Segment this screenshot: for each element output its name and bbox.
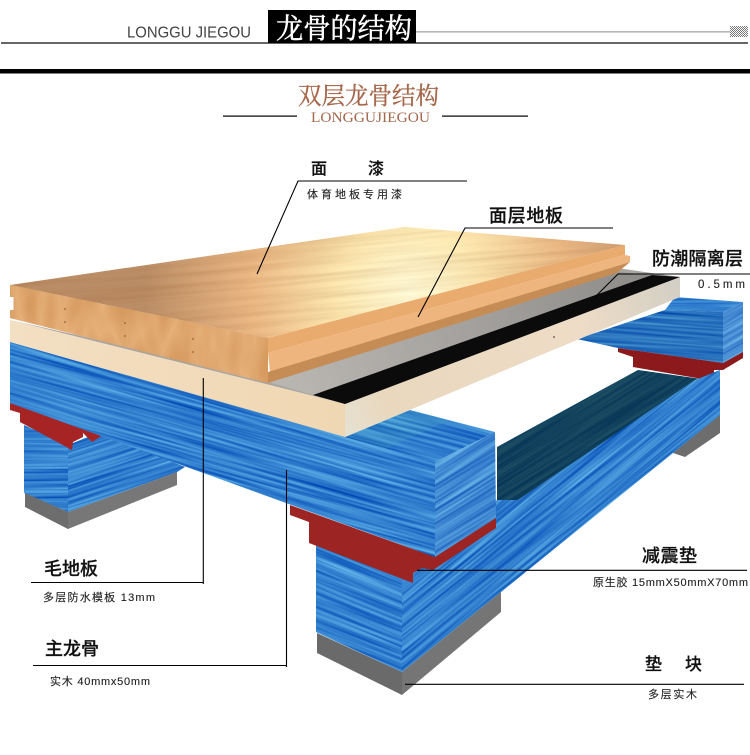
joist end face — [316, 546, 402, 672]
section title: LONGGUJIEGOU — [311, 110, 430, 126]
joist side face — [402, 370, 720, 672]
label: paint: 漆 — [368, 160, 384, 178]
label: subfloor — [31, 378, 203, 604]
label: paint: 面 — [311, 161, 327, 178]
label: paint — [257, 160, 467, 274]
lower long joist — [316, 370, 720, 695]
label: spacer block — [405, 655, 744, 701]
wood surface plank — [10, 227, 630, 383]
grey block right — [672, 415, 720, 457]
left red cushion — [10, 403, 103, 450]
plank tongue side — [268, 245, 625, 353]
label: surface floor — [418, 206, 613, 317]
right rear joist block — [578, 297, 743, 363]
label: spacer block: 垫 — [645, 655, 662, 674]
joist dark top face — [497, 370, 699, 500]
label: main joist: 主龙骨 — [45, 639, 99, 659]
section title: 双层龙骨结构 — [298, 83, 439, 110]
label: spacer block: 多层实木 — [648, 687, 697, 701]
label: damping pad: 减震垫 — [642, 546, 697, 566]
right rear red cushion — [618, 348, 743, 380]
left lower block — [24, 425, 185, 529]
plank top — [10, 227, 624, 338]
label: paint: 体育地板专用漆 — [307, 187, 402, 201]
section title — [223, 83, 528, 126]
header title box: 龙骨的结构 — [276, 13, 412, 45]
plank front face — [10, 285, 268, 383]
label: main joist: 实木 40mmx50mm — [50, 674, 150, 688]
front red cushion — [290, 505, 496, 583]
label: subfloor: 毛地板 — [44, 559, 98, 579]
subfloor cream board — [10, 268, 680, 437]
label: spacer block: 块 — [685, 655, 702, 674]
label: main joist — [33, 470, 286, 688]
header band — [1, 10, 748, 45]
moisture barrier black — [313, 275, 680, 404]
front main joist — [10, 342, 496, 557]
label: damping pad — [417, 546, 748, 589]
label: moisture barrier — [595, 249, 750, 297]
label: surface floor: 面层地板 — [489, 206, 563, 226]
header english subtitle: LONGGU JIEGOU — [127, 24, 251, 42]
floor structure illustration — [10, 208, 743, 695]
label: damping pad: 原生胶 15mmX50mmX70mm — [593, 575, 748, 589]
moisture barrier grey — [268, 272, 652, 395]
label: moisture barrier: 0.5mm — [698, 279, 745, 291]
grey spacer block — [317, 633, 402, 695]
wood nail dots — [64, 308, 194, 353]
label: subfloor: 多层防水模板 13mm — [43, 590, 155, 604]
label: moisture barrier: 防潮隔离层 — [652, 249, 743, 269]
